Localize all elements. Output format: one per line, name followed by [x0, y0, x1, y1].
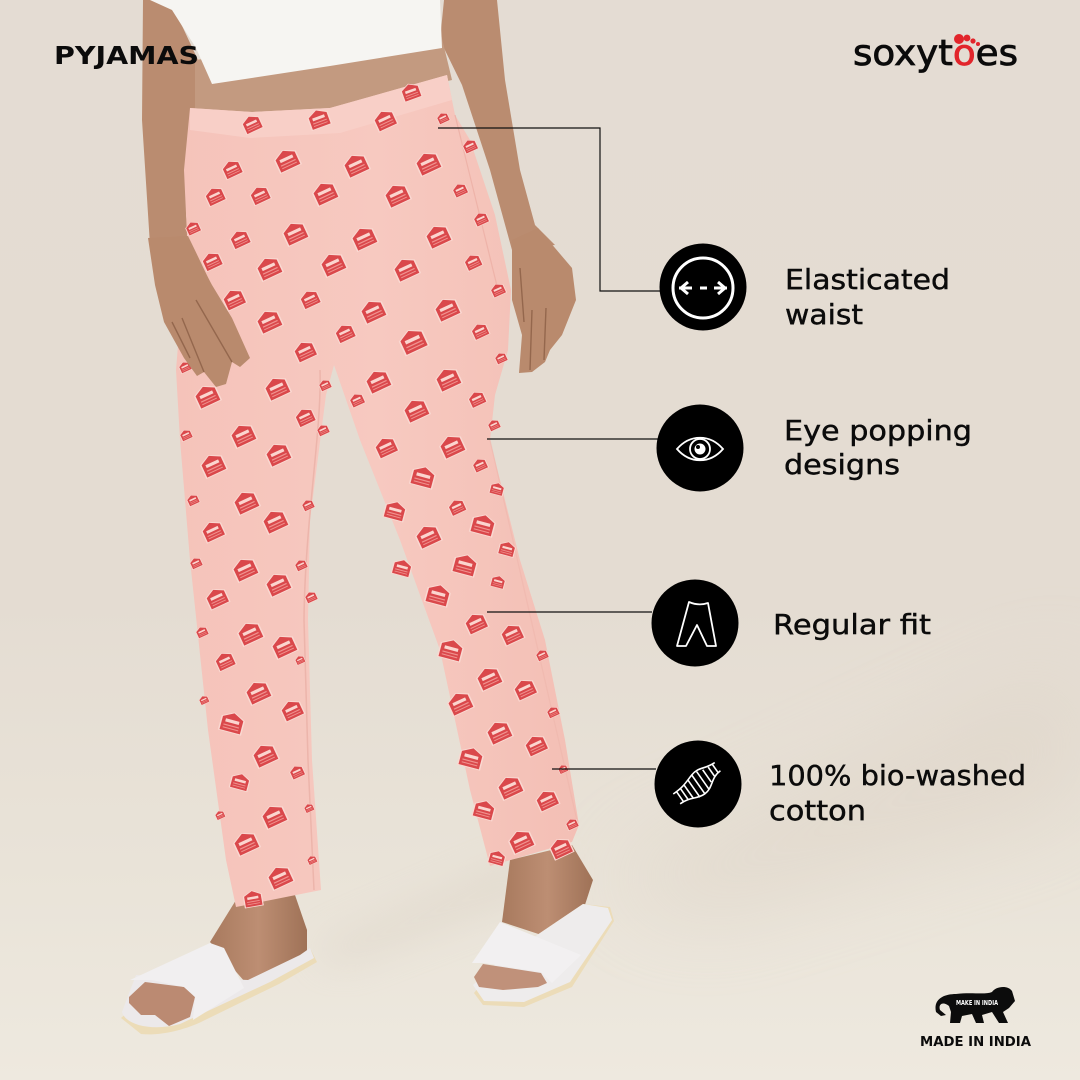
feature text: bio-washed cotton: 100% bio-washed: [769, 759, 1026, 792]
leader line: regular fit: [487, 611, 652, 613]
pyjama pants: [176, 75, 580, 909]
white top: [150, 0, 442, 84]
icon: pants: [652, 580, 738, 666]
model figure: [121, 0, 614, 1034]
logo: soxytoes: [853, 33, 1018, 74]
icon: make in india lion: MAKE IN INDIA: [956, 999, 998, 1007]
made in india label: MADE IN INDIA: [920, 1035, 1031, 1050]
floor shadow: [310, 660, 1080, 965]
left ankle: [210, 895, 307, 982]
icon: make in india lion: [936, 987, 1015, 1023]
icon: DNA helix: [654, 740, 742, 828]
left slipper: [121, 943, 317, 1034]
logo toe dots: [954, 34, 980, 46]
right slipper: [472, 904, 614, 1007]
feature text: elasticated waist: Elasticated: [785, 263, 950, 296]
leader line: elasticated waist: [438, 128, 660, 291]
red motel motifs: [177, 80, 580, 909]
feature text: bio-washed cotton: [769, 759, 1026, 827]
feature text: eye popping designs: designs: [784, 448, 900, 481]
leader line: cotton: [552, 768, 656, 770]
right hand: [512, 228, 576, 373]
left hand over pants: [148, 236, 250, 387]
logo wordmark: soxytoes: [853, 33, 1018, 74]
right arm: [440, 0, 555, 250]
feature text: elasticated waist: [785, 263, 950, 331]
torso skin: [195, 30, 452, 118]
feature text: elasticated waist: waist: [785, 298, 863, 331]
feature text: regular fit: Regular fit: [773, 608, 931, 641]
icon: eye: [656, 404, 744, 492]
leader line: eye popping designs: [487, 438, 658, 440]
brand title: PYJAMAS: PYJAMAS: [54, 41, 199, 70]
feature text: eye popping designs: Eye popping: [784, 414, 972, 447]
feature text: eye popping designs: [784, 414, 972, 481]
left arm: [142, 0, 198, 245]
feature text: bio-washed cotton: cotton: [769, 794, 866, 827]
icon: elastic waist arrows: [660, 244, 746, 330]
right ankle: [502, 845, 593, 945]
